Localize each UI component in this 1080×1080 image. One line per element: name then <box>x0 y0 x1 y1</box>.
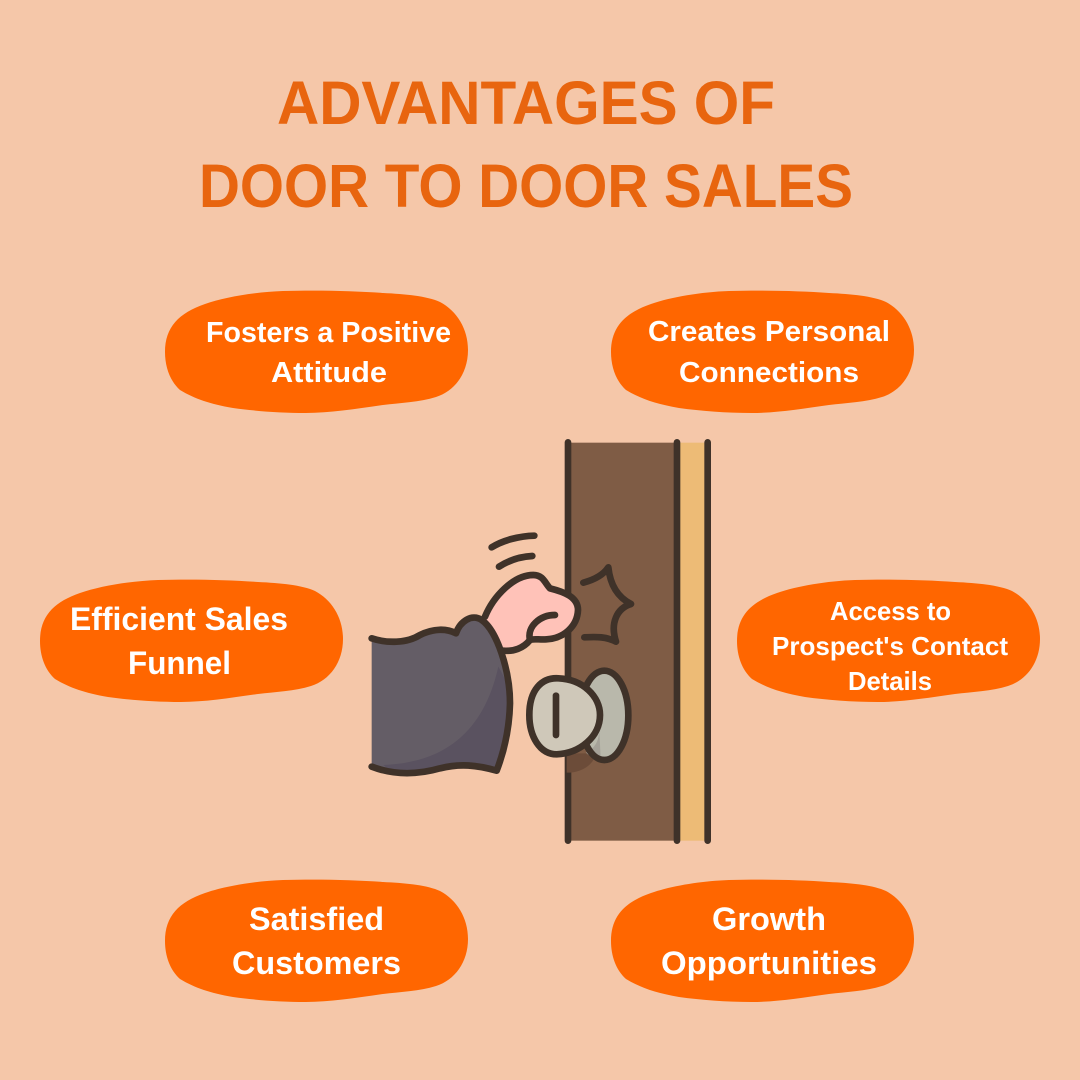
panel: Satisfied Customers <box>165 880 468 1002</box>
panel: Access to Prospect's Contact Details: Access to <box>830 596 951 626</box>
icon: motion lines <box>492 536 534 567</box>
panel: Efficient Sales Funnel: Funnel <box>128 645 231 681</box>
panel: Efficient Sales Funnel <box>40 580 343 702</box>
illustration: hand knocking on door <box>372 442 708 841</box>
panel: Growth Opportunities: Opportunities <box>661 945 877 981</box>
title <box>199 69 853 220</box>
icon: sleeve <box>372 618 510 773</box>
panel: Growth Opportunities: Growth <box>712 901 826 937</box>
title: DOOR TO DOOR SALES <box>199 152 853 220</box>
panel: Fosters a Positive Attitude: Attitude <box>271 357 387 389</box>
panel: Creates Personal Connections: Creates Personal <box>648 316 890 348</box>
icon: knock impact star <box>583 567 631 642</box>
icon: door knob <box>529 671 628 773</box>
icon: hand <box>485 575 578 651</box>
panel: Creates Personal Connections <box>611 291 914 413</box>
title: ADVANTAGES OF <box>277 69 775 137</box>
panel: Fosters a Positive Attitude <box>165 291 468 413</box>
panel: Fosters a Positive Attitude: Fosters a Positive <box>206 317 451 349</box>
panel: Access to Prospect's Contact Details <box>737 580 1040 702</box>
panel: Efficient Sales Funnel: Efficient Sales <box>70 601 288 637</box>
door <box>568 442 708 841</box>
panel: Access to Prospect's Contact Details: Prospect's Contact <box>772 631 1008 661</box>
panel: Satisfied Customers: Satisfied <box>249 901 384 937</box>
panel: Satisfied Customers: Customers <box>232 945 401 981</box>
panel: Creates Personal Connections: Connections <box>679 357 859 389</box>
panel: Access to Prospect's Contact Details: Details <box>848 666 932 696</box>
panel: Growth Opportunities <box>611 880 914 1002</box>
